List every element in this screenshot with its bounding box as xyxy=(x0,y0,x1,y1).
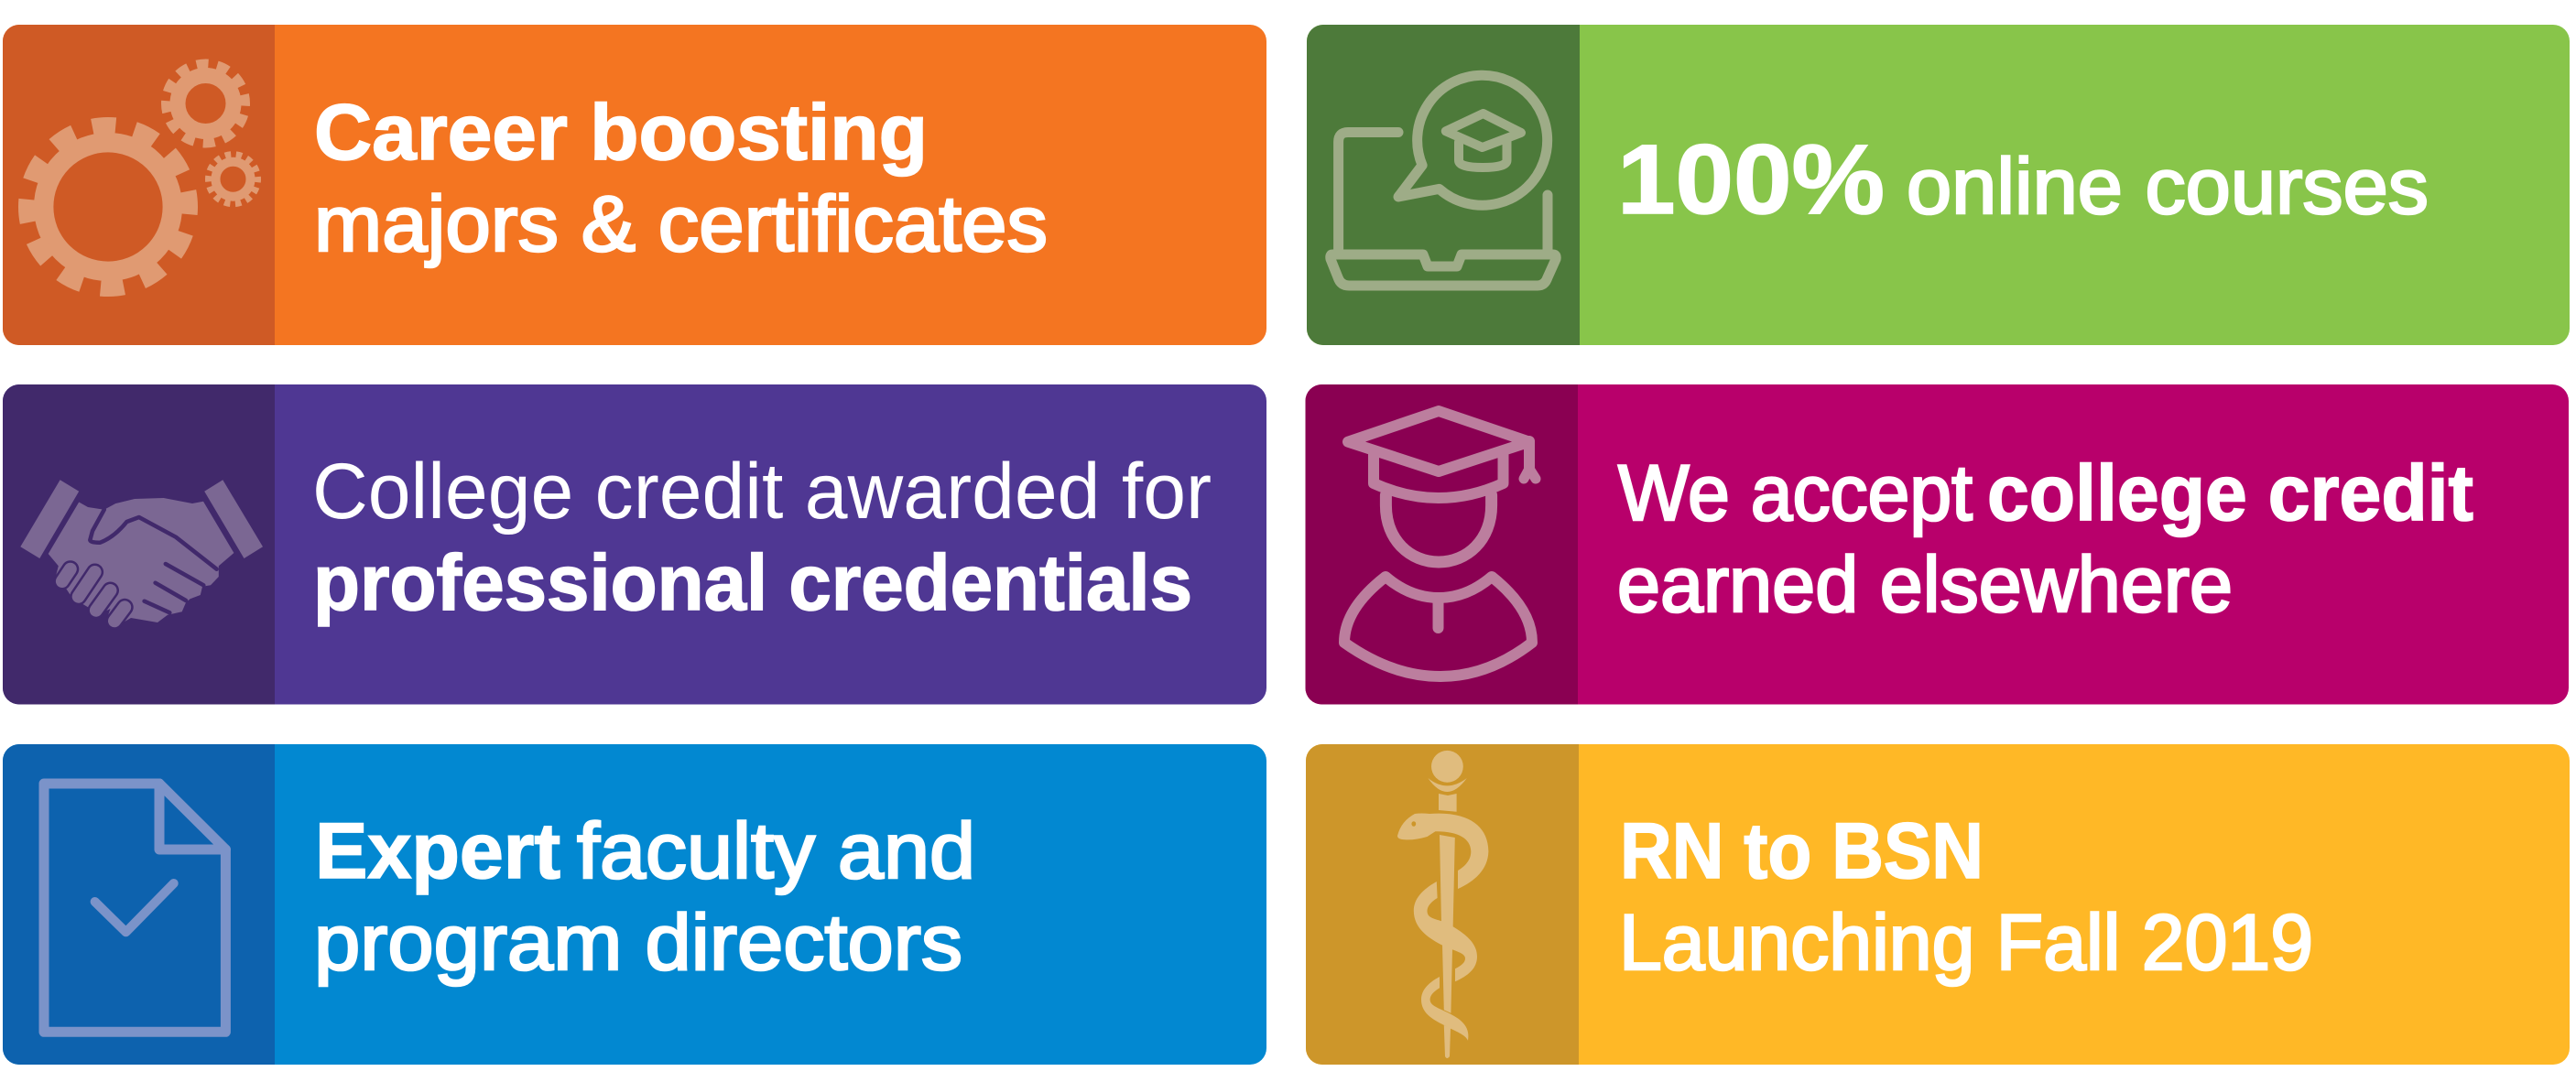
panel: 100% online courses xyxy=(1307,25,2570,345)
text: majors and certificates: majors & certificates xyxy=(314,180,1048,268)
text: expert: Expert xyxy=(315,807,560,895)
icon: laptop with graduation speech bubble xyxy=(1331,75,1556,286)
text: program directors: program directors xyxy=(314,899,962,987)
icon: gears xyxy=(28,64,258,287)
text: rn to bsn: RN to BSN xyxy=(1620,807,1984,895)
panel: expert faculty and program directors xyxy=(3,744,1266,1065)
icon: rod of asclepius xyxy=(1397,751,1488,1058)
text: college credit: college credit xyxy=(1987,449,2473,537)
text: faculty and: faculty and xyxy=(577,807,975,895)
icon: document with check mark xyxy=(44,784,225,1032)
text: 100%: 100% xyxy=(1617,124,1885,234)
text: professional credentials: professional credentials xyxy=(313,539,1192,627)
text: launching fall 2019: Launching Fall 2019 xyxy=(1619,899,2313,987)
icon: handshake xyxy=(20,480,263,625)
text: earned elsewhere: earned elsewhere xyxy=(1617,541,2233,629)
panel: we accept college credit earned elsewhere xyxy=(1306,384,2569,705)
panel: career boosting majors and certificates xyxy=(3,25,1266,345)
text: we accept: We accept xyxy=(1618,449,1973,537)
panel: college credit for professional credentials xyxy=(3,384,1266,705)
icon: graduate xyxy=(1344,411,1536,676)
text: career boosting: Career boosting xyxy=(314,89,928,177)
panel: rn to bsn launching fall 2019 xyxy=(1306,744,2570,1065)
text: online courses: online courses xyxy=(1907,143,2429,231)
text: college credit awarded for: College credit awarded for xyxy=(312,448,1212,536)
